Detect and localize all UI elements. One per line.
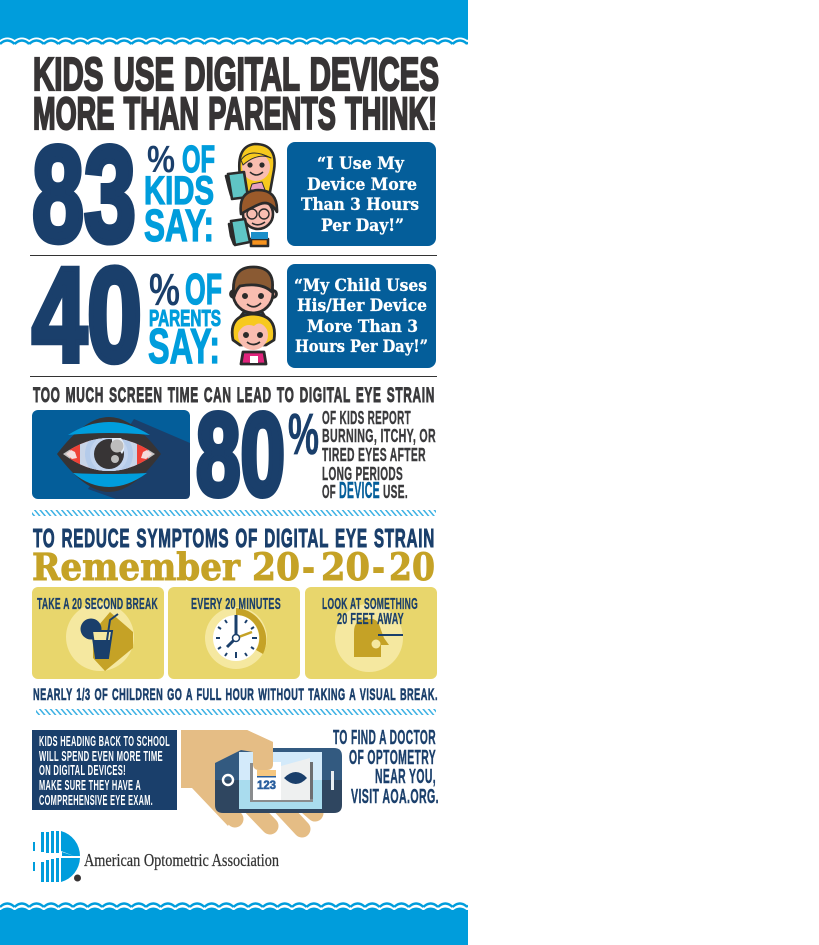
stat: 40 percent of parents	[32, 241, 222, 390]
book: 123	[257, 778, 276, 792]
top banner	[0, 0, 468, 46]
text: kids report: TIRED EYES AFTER	[322, 444, 426, 465]
stat: 80 percent: %	[288, 402, 319, 467]
callout: back to school: MAKE SURE THEY HAVE A	[39, 778, 141, 794]
heading: remember 20-20-20	[32, 545, 435, 589]
card: look at something 20 feet away	[305, 587, 437, 679]
book	[181, 730, 313, 802]
logo: american optometric association: American Optometric Association	[84, 850, 279, 870]
quote box: kids: Per Day!”	[321, 216, 404, 235]
card: every 20 minutes	[168, 587, 300, 679]
text: kids report: LONG PERIODS	[322, 463, 403, 484]
text: kids report	[322, 407, 436, 503]
quote box: parents	[287, 264, 436, 368]
text: find a doctor	[333, 727, 439, 808]
kids: KIDS	[144, 169, 214, 213]
icon: clock	[213, 608, 266, 661]
title: KIDS USE DIGITAL DEVICES	[33, 48, 439, 100]
icon: hand holding phone with book	[181, 730, 342, 829]
quote box: kids	[287, 142, 436, 246]
card: look at something 20 feet away: LOOK AT SOMETHING	[322, 596, 418, 613]
quote box: parents: More Than 3	[307, 317, 418, 336]
text: find a doctor: NEAR YOU,	[375, 766, 436, 788]
card: 20 second break: TAKE A 20 SECOND BREAK	[37, 596, 158, 613]
stat: 83 percent of kids	[32, 118, 215, 270]
heading: remember 20-20-20: Remember	[32, 545, 240, 589]
heading: remember 20-20-20: 20	[389, 545, 435, 589]
text: find a doctor: VISIT AOA.ORG.	[351, 786, 439, 808]
stat: 40 percent of parents: OF	[185, 265, 222, 314]
heading: remember 20-20-20: 20	[252, 545, 300, 589]
icon: head profile	[354, 619, 403, 657]
quote box: kids: “I Use My	[317, 154, 404, 173]
text: kids report: USE.	[383, 481, 408, 502]
text: kids report: OF KIDS REPORT	[322, 407, 411, 428]
callout: back to school: KIDS HEADING BACK TO SCHOOL	[39, 734, 170, 750]
parents: PARENTS	[149, 305, 221, 331]
callout: back to school	[32, 730, 177, 810]
heading: too much screen time: TOO MUCH SCREEN TIME CAN LEAD TO DIGITAL EYE STRAIN	[33, 383, 435, 407]
quote box: kids: Than 3 Hours	[301, 195, 419, 214]
bottom banner	[0, 901, 468, 945]
quote box: kids: Device More	[307, 175, 417, 194]
heading: remember 20-20-20: -	[372, 545, 385, 589]
stat: 83 percent of kids: OF	[182, 139, 215, 181]
card: every 20 minutes: EVERY 20 MINUTES	[191, 596, 281, 613]
callout: back to school: ON DIGITAL DEVICES!	[39, 763, 126, 779]
text: find a doctor: OF OPTOMETRY	[349, 747, 436, 769]
stat: 80 percent: 80	[196, 389, 285, 520]
text: find a doctor: TO FIND A DOCTOR	[333, 727, 436, 749]
percent of: %	[147, 139, 175, 181]
card: 20 second break	[32, 587, 164, 679]
quote box: parents: His/Her Device	[297, 296, 427, 315]
say: SAY:	[144, 200, 214, 251]
heading: remember 20-20-20: -	[302, 545, 315, 589]
card: look at something 20 feet away: 20 FEET AWAY	[337, 611, 404, 628]
say: SAY:	[148, 320, 220, 374]
text: kids report: OF	[322, 481, 336, 502]
quote box: parents: “My Child Uses	[294, 276, 427, 295]
text: kids report: BURNING, ITCHY, OR	[322, 425, 436, 446]
title: MORE THAN PARENTS THINK!	[33, 88, 437, 139]
number 40: 40	[32, 241, 142, 390]
text: nearly one third: NEARLY 1/3 OF CHILDREN GO A FULL HOUR WITHOUT TAKING A VISUAL BREAK.	[33, 685, 438, 704]
heading: remember 20-20-20: 20	[321, 545, 370, 589]
icon: drink	[80, 612, 133, 671]
logo: american optometric association	[33, 831, 279, 882]
icon: red eye panel	[32, 410, 190, 499]
heading: to reduce symptoms: TO REDUCE SYMPTOMS OF DIGITAL EYE STRAIN	[33, 523, 435, 553]
text: kids report: DEVICE	[339, 477, 380, 503]
icon: parent and child	[230, 267, 276, 364]
callout: back to school: COMPREHENSIVE EYE EXAM.	[39, 793, 153, 809]
title	[33, 48, 439, 139]
number 83: 83	[32, 118, 136, 270]
quote box: parents: Hours Per Day!”	[295, 337, 428, 356]
callout: back to school: WILL SPEND EVEN MORE TIME	[39, 749, 163, 765]
icon: girl and boy with tablets	[226, 144, 277, 246]
percent of: %	[149, 264, 180, 315]
